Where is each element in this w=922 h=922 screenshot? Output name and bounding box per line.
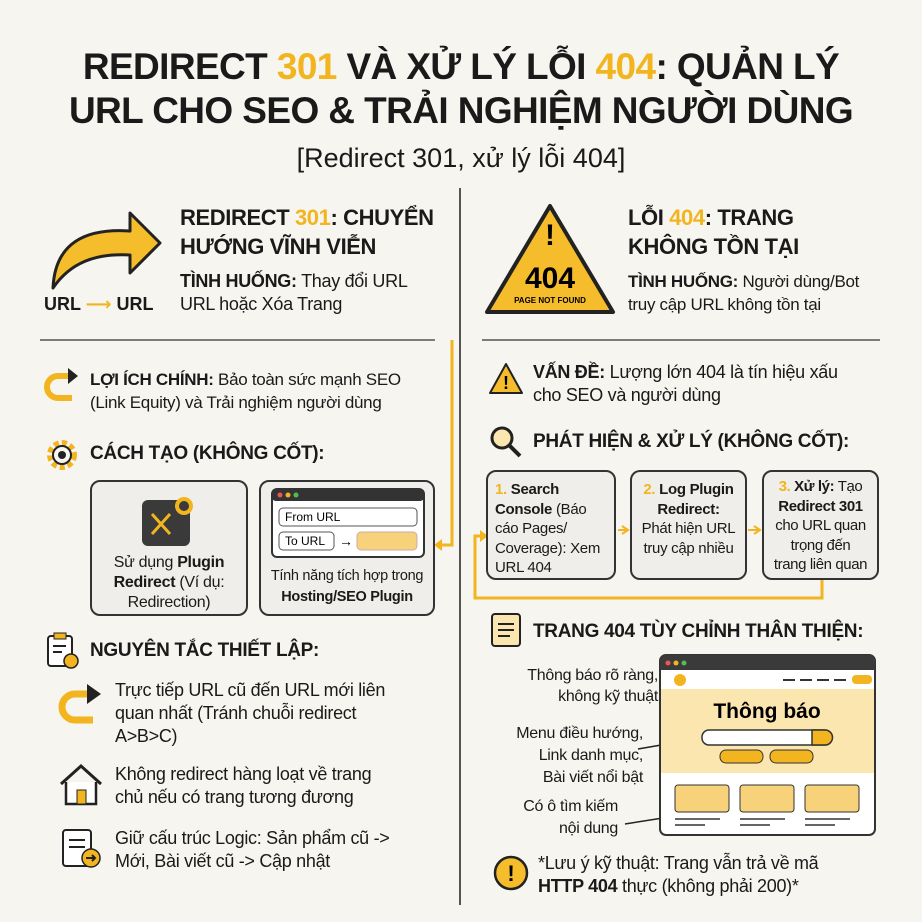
text: Có ô tìm kiếm (523, 798, 618, 815)
heading: redirect 301: REDIRECT 301: CHUYỂN (180, 205, 434, 230)
rule 1: Trực tiếp URL cũ đến URL mới liên (115, 680, 385, 700)
section: trang 404 tùy chỉnh (491, 613, 863, 647)
label: URL to URL: URL ⟶ URL (44, 294, 153, 314)
step 1 (486, 470, 616, 580)
heading: redirect 301: HƯỚNG VĨNH VIỄN (180, 234, 376, 259)
icon: warning 404: 404 (525, 262, 575, 295)
text: Link danh mục, (539, 747, 643, 764)
card: plugin redirect: Redirect (Ví dụ: (114, 574, 224, 591)
rule 1: A>B>C) (115, 726, 177, 746)
icon: browser form: To URL (285, 534, 325, 548)
step 3: trọng đến (791, 536, 850, 554)
icon: browser form: From URL (285, 510, 341, 524)
icon: exclamation (494, 856, 528, 890)
icon: curved arrow (52, 212, 162, 290)
icon: magnifier (490, 426, 522, 458)
note: technical: HTTP 404 thực (không phải 200)* (538, 876, 799, 896)
icon: warning 404 (485, 204, 616, 314)
rule 2: chủ nếu có trang tương đương (115, 787, 353, 807)
text: Bài viết nổi bật (543, 769, 643, 786)
step 2: Redirect: (657, 500, 720, 518)
section: lợi ích (44, 368, 401, 412)
section: phát hiện (490, 426, 849, 458)
rule 1 (58, 680, 385, 746)
section: cách tạo (47, 440, 324, 470)
step 3: cho URL quan (775, 517, 866, 534)
illustration: custom 404 page mockup (624, 654, 876, 836)
text: tình huống left (180, 270, 408, 314)
labels: 404 page features (527, 667, 658, 705)
rule 2 (60, 764, 371, 807)
icon: document (491, 613, 521, 647)
icon: browser form: → (339, 533, 353, 549)
step 3: trang liên quan (774, 556, 867, 573)
text (90, 370, 401, 412)
icon: warning 404: PAGE NOT FOUND (514, 296, 586, 305)
text: tình huống right (628, 272, 860, 314)
text: tình huống left: URL hoặc Xóa Trang (180, 294, 342, 314)
icon: loop arrow (44, 368, 78, 401)
step 1: Console (Báo (495, 500, 586, 518)
text: Menu điều hướng, (516, 725, 643, 742)
section: nguyên tắc heading: NGUYÊN TẮC THIẾT LẬP: (90, 640, 319, 661)
section: vấn đề: cho SEO và người dùng (533, 385, 721, 405)
icon: warning (489, 363, 523, 394)
text: tình huống right: TÌNH HUỐNG: Người dùng/Bot (628, 272, 859, 291)
text: (Link Equity) và Trải nghiệm người dùng (90, 393, 381, 412)
step 1: 1. Search (495, 481, 559, 498)
text: nội dung (559, 820, 618, 837)
icon: document arrow (62, 829, 101, 868)
step 1: URL 404 (495, 559, 552, 576)
step 2 (630, 470, 747, 580)
card: plugin redirect: Redirection) (128, 594, 210, 611)
section: phát hiện: PHÁT HIỆN & XỬ LÝ (KHÔNG CỐT): (533, 431, 849, 452)
section: vấn đề (489, 362, 838, 405)
note: technical (494, 852, 819, 896)
step 2: Phát hiện URL (642, 520, 735, 537)
text: tình huống right: truy cập URL không tồn tại (628, 295, 821, 314)
card: hosting plugin: Hosting/SEO Plugin (281, 589, 413, 605)
step 3: Redirect 301 (778, 498, 863, 514)
card: hosting plugin (259, 480, 435, 616)
heading: lỗi 404 (628, 204, 799, 259)
icon: warning: ! (503, 373, 509, 393)
text: tình huống left: TÌNH HUỐNG: Thay đổi URL (180, 271, 408, 291)
section: vấn đề: VẤN ĐỀ: Lượng lớn 404 là tín hiệu xấu (533, 362, 838, 382)
icon: warning 404: ! (545, 219, 555, 252)
text: LỢI ÍCH CHÍNH: Bảo toàn sức mạnh SEO (90, 370, 401, 389)
section: trang 404 tùy chỉnh: TRANG 404 TÙY CHỈNH THÂN THIỆN: (533, 621, 863, 642)
heading: CÁCH TẠO (KHÔNG CỐT): (90, 443, 324, 464)
rule 3: Giữ cấu trúc Logic: Sản phẩm cũ -> (115, 828, 390, 848)
step 1: Coverage): Xem (495, 540, 600, 556)
icon: browser form (271, 488, 425, 558)
heading: lỗi 404: KHÔNG TỒN TẠI (628, 234, 799, 259)
rule 1: quan nhất (Tránh chuỗi redirect (115, 703, 356, 723)
card: hosting plugin: Tính năng tích hợp trong (271, 568, 423, 584)
title (69, 46, 853, 131)
connector: left section to log plugin (435, 340, 454, 551)
card: plugin redirect (90, 480, 248, 616)
rule 2: Không redirect hàng loạt về trang (115, 764, 371, 784)
step 2: truy cập nhiều (643, 540, 734, 556)
icon: clipboard (47, 632, 79, 669)
card: plugin redirect: Sử dụng Plugin (114, 554, 224, 571)
labels: 404 page features: không kỹ thuật (558, 688, 658, 705)
heading: redirect 301 (180, 204, 434, 259)
icon: gear (47, 440, 77, 470)
subtitle: [Redirect 301, xử lý lỗi 404] (297, 143, 625, 173)
title: REDIRECT 301 VÀ XỬ LÝ LỖI 404: QUẢN LÝ (83, 46, 839, 87)
rule 3: Mới, Bài viết cũ -> Cập nhật (115, 851, 330, 871)
step 1: cáo Pages/ (495, 520, 567, 537)
title: URL CHO SEO & TRẢI NGHIỆM NGƯỜI DÙNG (69, 90, 853, 131)
illustration: custom 404 page mockup: Thông báo (713, 700, 821, 723)
flow steps (474, 470, 879, 600)
step 3 (762, 470, 879, 580)
heading: lỗi 404: LỖI 404: TRANG (628, 205, 794, 230)
step 2: 2. Log Plugin (643, 481, 734, 498)
icon: loop arrow (58, 684, 101, 724)
icon: exclamation: ! (507, 861, 515, 886)
step 3: 3. Xử lý: Tạo (779, 478, 862, 495)
icon: plugin (142, 497, 193, 546)
section: nguyên tắc heading (47, 632, 319, 669)
rule 3 (62, 828, 390, 871)
labels: 404 page features: Thông báo rõ ràng, (527, 667, 658, 684)
icon: home (60, 764, 102, 806)
note: technical: *Lưu ý kỹ thuật: Trang vẫn trả về mã (538, 853, 818, 873)
